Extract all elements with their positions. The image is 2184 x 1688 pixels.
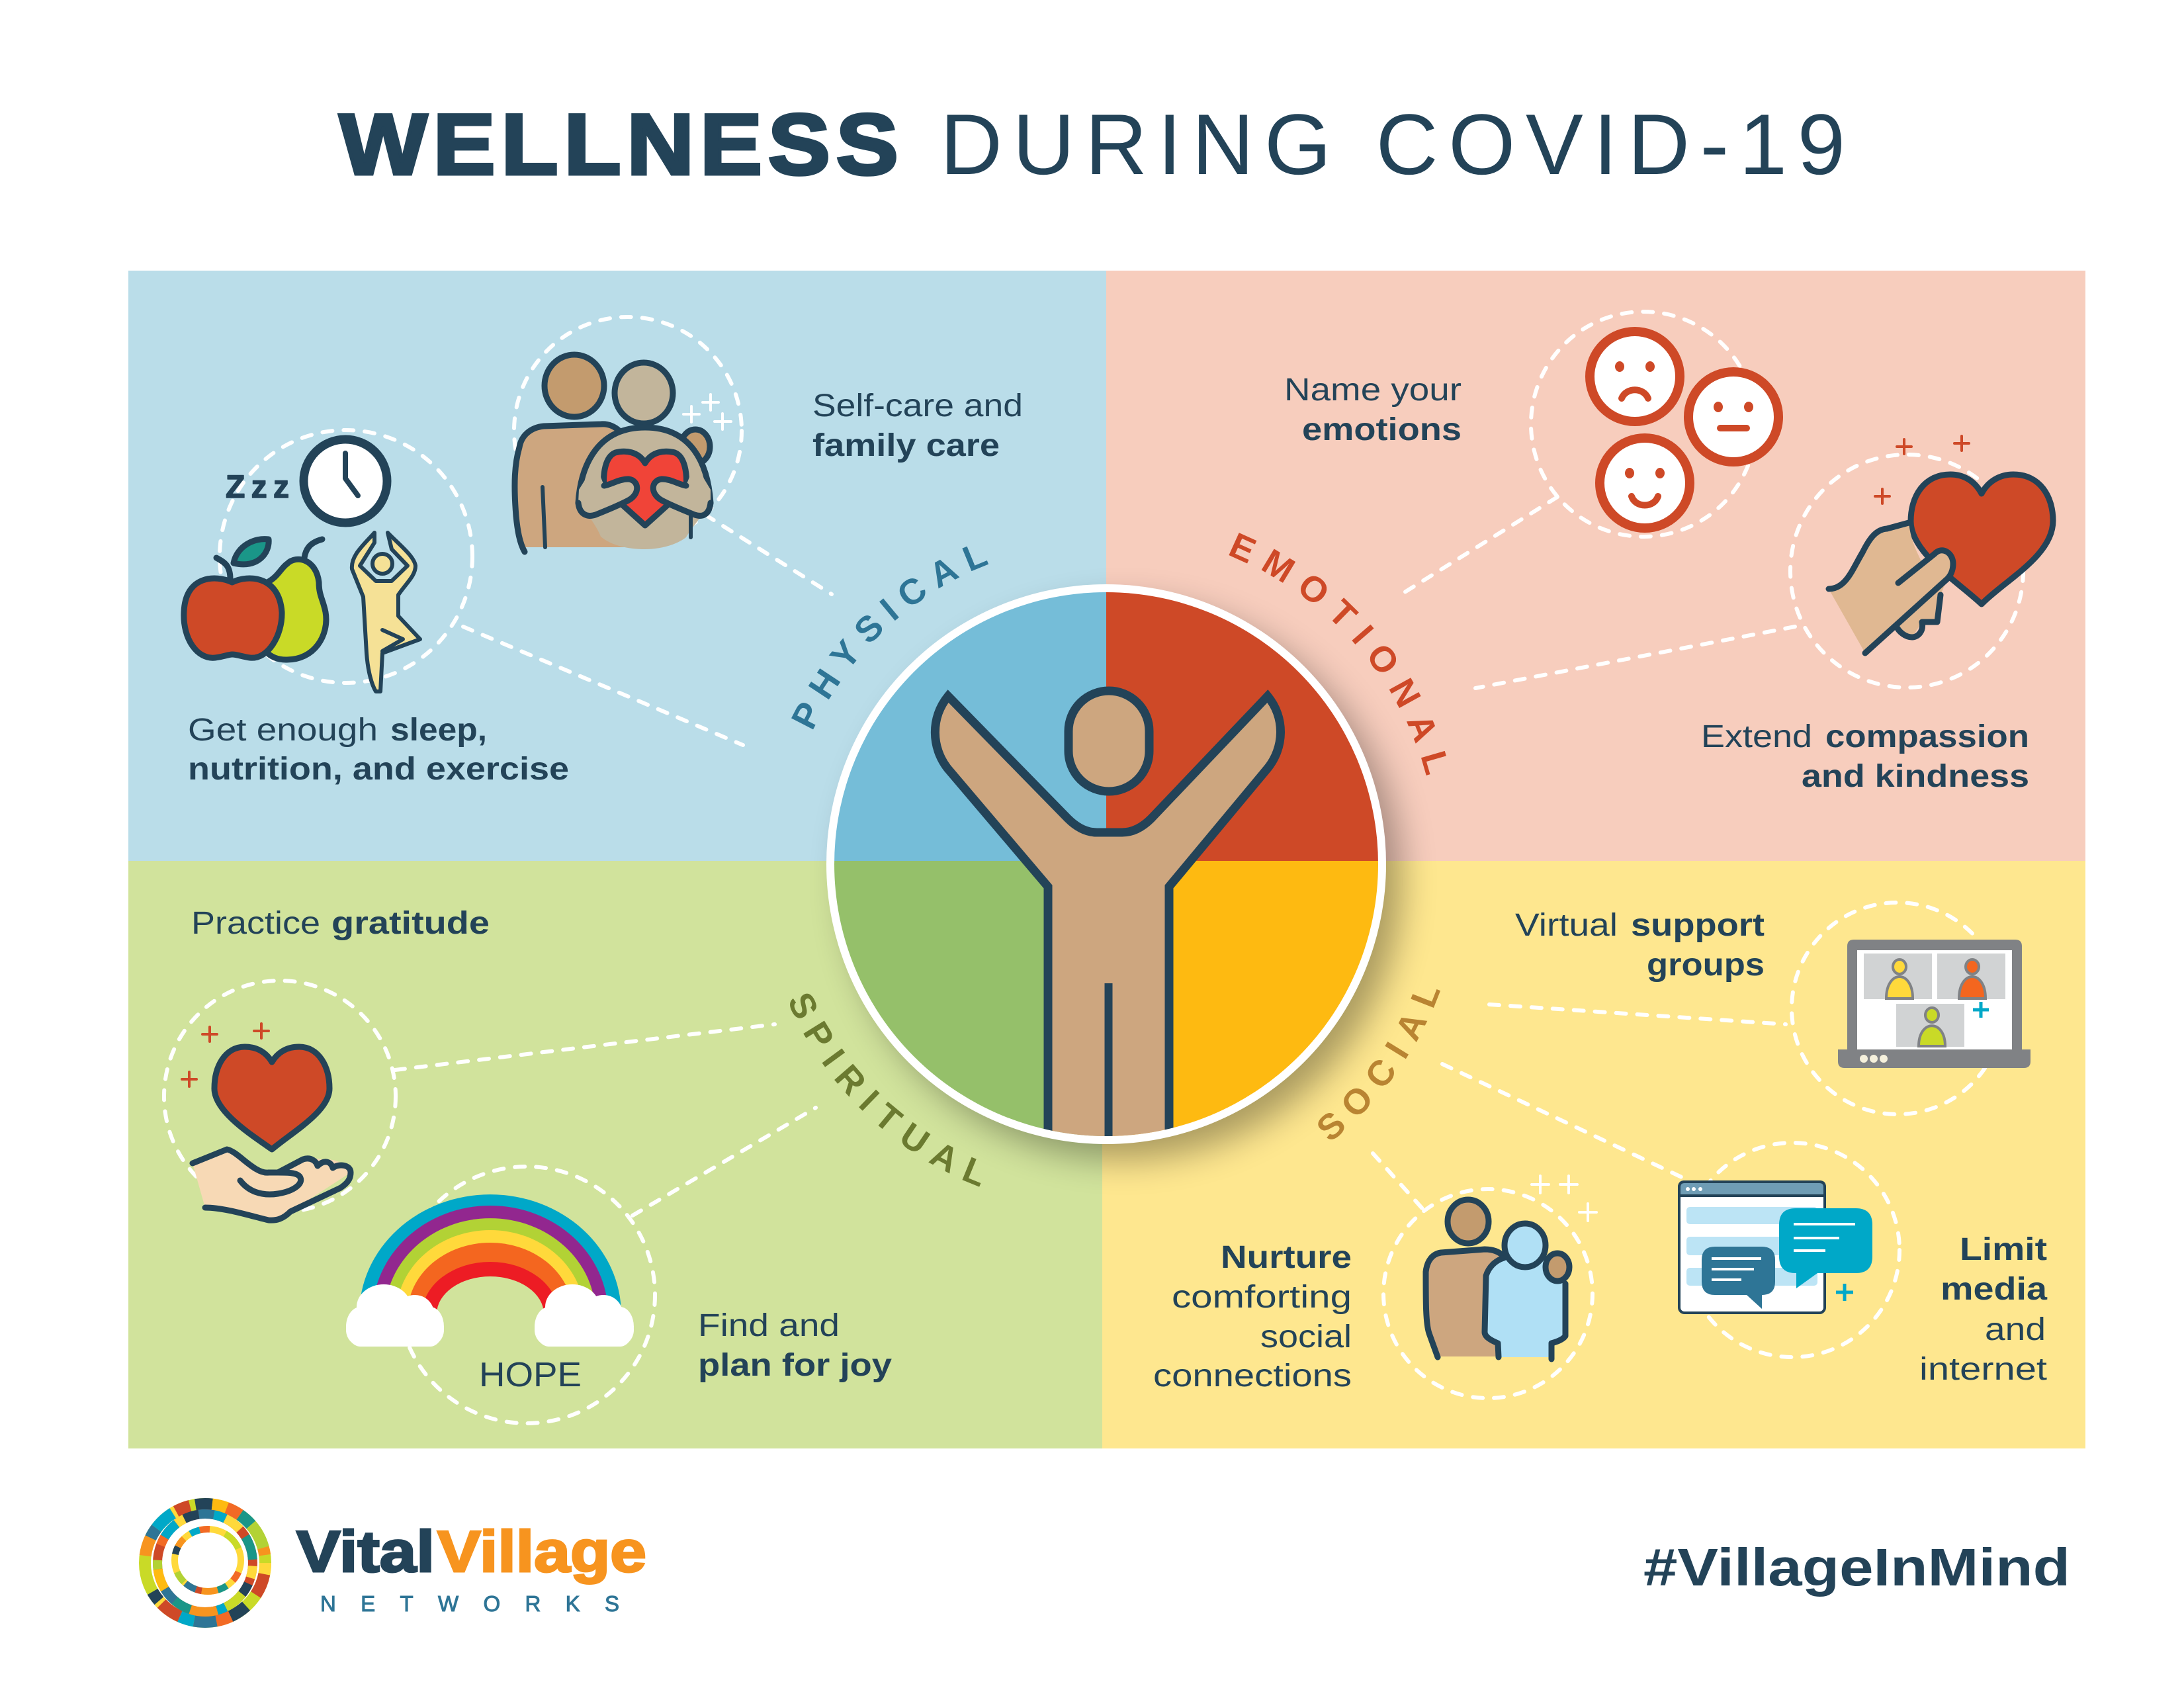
text: name your emotions: emotions xyxy=(1302,412,1462,447)
text: limit media and internet: Limit xyxy=(1960,1232,2047,1267)
text: sleep, nutrition, exercise: sleep, xyxy=(390,713,487,748)
text: nurture comforting social connections: comforting xyxy=(1172,1280,1352,1315)
connector dashes and dashed circles: emotional xyxy=(1399,312,2023,688)
text: virtual support groups xyxy=(1515,908,1765,983)
logo: wordmark: Village xyxy=(437,1519,646,1584)
text: self-care and family care: Self-care and xyxy=(812,388,1023,423)
text: name your emotions: Name your xyxy=(1284,373,1462,408)
panel: physical background xyxy=(128,271,1106,861)
text: find and plan for joy: Find and xyxy=(698,1308,840,1343)
icon: three emotion faces xyxy=(1590,332,1778,528)
logo: wordmark xyxy=(296,1519,646,1616)
icon: browser and chat bubbles xyxy=(1679,1182,1872,1313)
text: limit media and internet: media xyxy=(1941,1272,2047,1307)
text: find and plan for joy: plan for joy xyxy=(698,1348,892,1383)
icon: hand holding heart xyxy=(1829,436,2053,653)
text: hope: HOPE xyxy=(479,1356,582,1394)
label: emotional: EMOTIONAL xyxy=(1229,533,1446,776)
text: practice gratitude xyxy=(191,906,490,941)
text: self-care and family care: family care xyxy=(812,428,1000,463)
central wheel with person figure xyxy=(826,584,1386,1145)
panel: spiritual background xyxy=(128,861,1102,1448)
title: DURING COVID-19 xyxy=(940,96,1845,193)
text: virtual support groups: Virtual xyxy=(1515,908,1618,943)
text: limit media and internet: internet xyxy=(1919,1352,2047,1387)
text: limit media and internet xyxy=(1919,1232,2047,1387)
text: sleep, nutrition, exercise: nutrition, and exercise xyxy=(188,752,569,787)
connector dashes and dashed circles: social xyxy=(1373,903,2003,1398)
text: practice gratitude: gratitude xyxy=(331,906,490,941)
text: extend compassion and kindness: compassion xyxy=(1825,719,2029,754)
text: extend compassion and kindness: Extend xyxy=(1701,719,1812,754)
icon: laptop video call xyxy=(1838,940,2031,1068)
title: WELLNESS xyxy=(339,97,898,193)
text: nurture comforting social connections: Nurture xyxy=(1221,1240,1352,1275)
label: social: SOCIAL xyxy=(1318,989,1440,1139)
text: name your emotions xyxy=(1284,373,1462,447)
text: virtual support groups: support xyxy=(1631,908,1765,943)
text: extend compassion and kindness xyxy=(1701,719,2029,794)
connector dashes and dashed circles: physical xyxy=(220,317,832,745)
hashtag: #VillageInMind xyxy=(1643,1538,2070,1597)
text: nurture comforting social connections: social xyxy=(1260,1319,1352,1355)
text: practice gratitude: Practice xyxy=(191,906,320,941)
text: virtual support groups: groups xyxy=(1647,948,1765,983)
icon: heart over open hand xyxy=(182,1024,351,1220)
label: physical: PHYSICAL xyxy=(791,547,988,729)
title xyxy=(339,96,1845,193)
panel: emotional background xyxy=(1106,271,2085,861)
text: extend compassion and kindness: and kindness xyxy=(1802,759,2029,794)
logo: ring mark xyxy=(145,1504,265,1622)
icon: rainbow with clouds xyxy=(346,1194,634,1347)
text: nurture comforting social connections: connections xyxy=(1153,1358,1352,1394)
text: self-care and family care xyxy=(812,388,1023,463)
text: nurture comforting social connections xyxy=(1153,1240,1352,1394)
text: find and plan for joy xyxy=(698,1308,892,1383)
text: sleep, nutrition, exercise: Get enough xyxy=(188,713,378,748)
text: sleep, nutrition, exercise xyxy=(188,713,569,787)
text: limit media and internet: and xyxy=(1985,1312,2046,1347)
icon: comforting social connection xyxy=(1426,1176,1596,1359)
logo: wordmark: NETWORKS xyxy=(320,1591,619,1616)
logo: wordmark: Vital xyxy=(296,1519,435,1584)
icon: sleep, nutrition, exercise: Zzz xyxy=(226,470,289,505)
icon: sleep, nutrition, exercise xyxy=(184,439,420,691)
label: spiritual: SPIRITUAL xyxy=(790,994,981,1187)
icon: family care xyxy=(515,355,731,552)
connector dashes and dashed circles: spiritual xyxy=(164,981,816,1423)
central circle shadow xyxy=(846,603,1401,1159)
panel: social background xyxy=(1102,861,2085,1448)
